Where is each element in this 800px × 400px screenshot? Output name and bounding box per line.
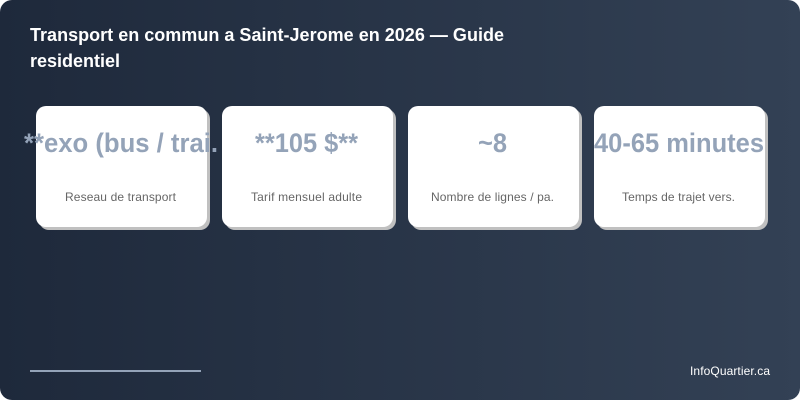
card 2 label: Tarif mensuel adulte: [251, 190, 362, 204]
footer accent line: [30, 370, 201, 372]
card 4 value: 40-65 minutes: [594, 128, 764, 158]
title: residentiel: [30, 51, 120, 71]
panel: card 2: [222, 106, 396, 230]
card 1 label: Reseau de transport: [65, 190, 177, 204]
footer brand: InfoQuartier.ca: [690, 364, 770, 378]
panel: card 4: [594, 106, 768, 230]
title: [30, 25, 504, 71]
panel: card 1: [24, 106, 218, 230]
panel: card 3: [408, 106, 582, 230]
card 4 label: Temps de trajet vers.: [622, 190, 735, 204]
card 1 value: **exo (bus / trai.: [24, 128, 218, 158]
card 3 label: Nombre de lignes / pa.: [431, 190, 554, 204]
card 2 value: **105 $**: [255, 128, 358, 158]
title: Transport en commun a Saint-Jerome en 2026 — Guide: [30, 25, 504, 45]
card 3 value: ~8: [478, 128, 507, 158]
